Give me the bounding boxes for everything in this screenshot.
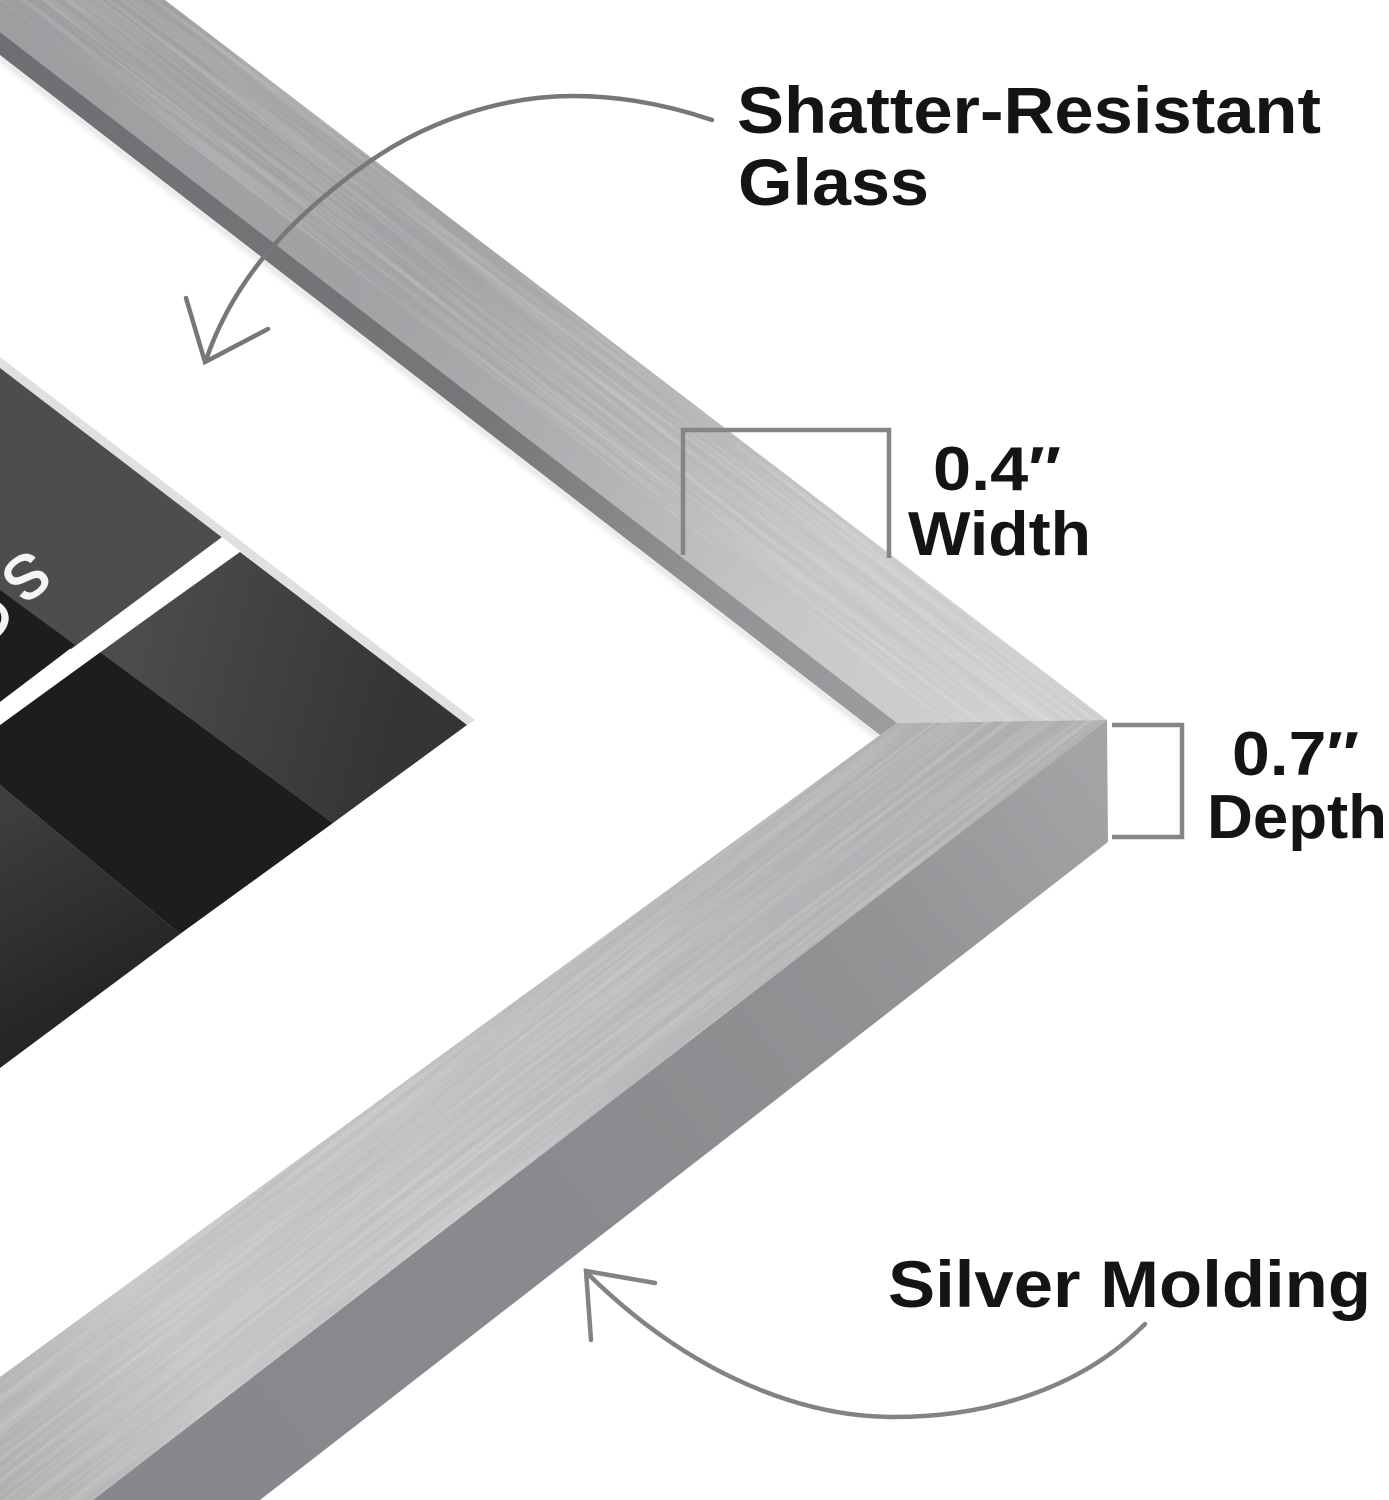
- label: depth: [1207, 720, 1387, 852]
- arrow: silver molding: [586, 1271, 1145, 1417]
- frame shadow: [0, 55, 880, 741]
- panel upper gray: [0, 368, 228, 652]
- label: width: [908, 435, 1091, 569]
- label: width: 0.4″: [933, 435, 1061, 504]
- artwork border: [0, 357, 475, 725]
- label: depth: 0.7″: [1232, 720, 1359, 789]
- panel lower gray: [100, 552, 467, 823]
- label: silver molding: Silver Molding: [888, 1247, 1371, 1321]
- artwork: dark print behind matte: [0, 357, 475, 1068]
- artwork letters: [0, 538, 63, 658]
- bottom bar side face: [93, 720, 1108, 1500]
- top bar inner lip: [0, 32, 897, 735]
- label: shatter-resistant glass: Glass: [738, 145, 929, 219]
- label: shatter-resistant glass: Shatter-Resistant: [737, 73, 1321, 147]
- bracket: depth: [1112, 725, 1182, 837]
- white divider: [0, 537, 240, 725]
- panel bottom gray: [0, 785, 180, 1068]
- label: depth: Depth: [1207, 783, 1387, 852]
- label: shatter-resistant glass: [737, 73, 1321, 219]
- arrow: shatter-resistant glass: [186, 96, 712, 362]
- panel upper black: [0, 590, 75, 702]
- label: width: Width: [908, 500, 1091, 569]
- frame: silver molding: [0, 0, 1108, 1500]
- bracket: width: [683, 430, 889, 558]
- panel lower black band: [0, 652, 333, 934]
- top bar face: [0, 0, 1107, 723]
- bottom bar face: [0, 720, 1107, 1500]
